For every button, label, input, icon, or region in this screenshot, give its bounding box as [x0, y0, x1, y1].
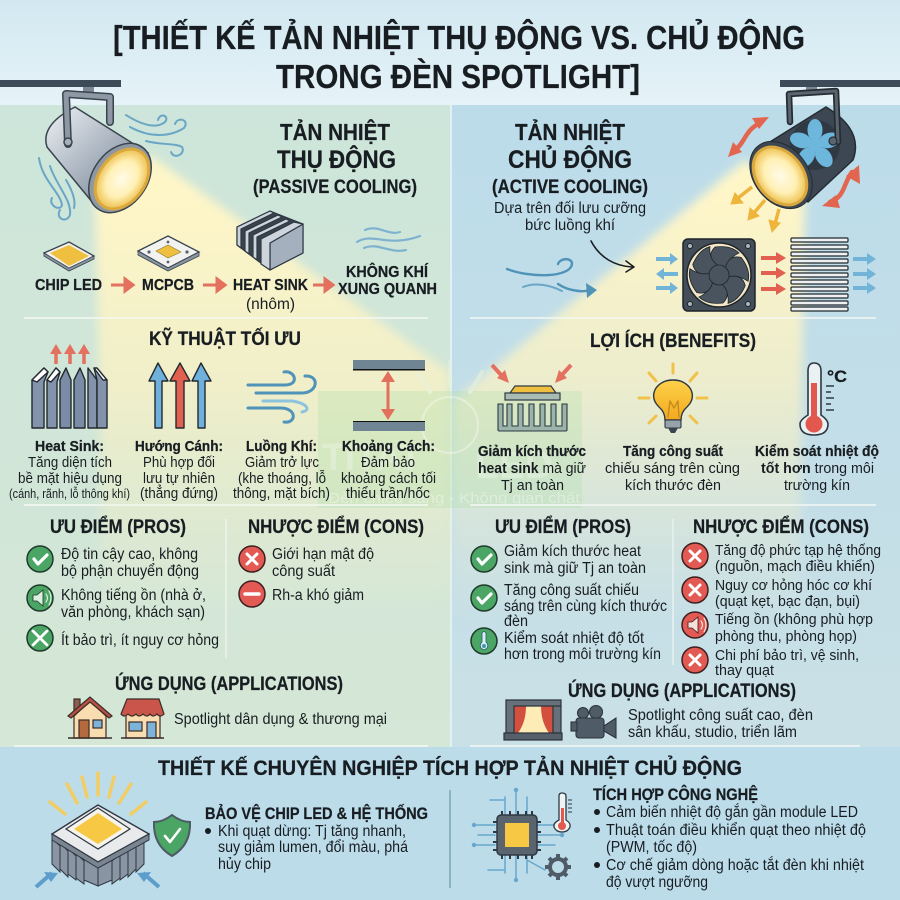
text: active cons list: Nguy cơ hỏng hóc cơ khí: [715, 577, 873, 594]
panel: active cooling background: [452, 105, 900, 747]
flow arrows: [111, 279, 333, 291]
section: active cons: [682, 516, 881, 679]
heading: passive cooling: THỤ ĐỘNG: [277, 144, 396, 174]
icon: thermometer: [800, 363, 847, 435]
text: LED chip protection: BẢO VỆ CHIP LED & HỆ THỐNG: [205, 803, 428, 823]
icon: finned heat sink with rising heat: [32, 344, 107, 428]
heading: cons: NHƯỢC ĐIỂM (CONS): [248, 516, 424, 538]
icon: check two: [471, 585, 497, 611]
watermark: TITAT: [322, 437, 422, 479]
text: airflow: [233, 438, 330, 502]
fan blades: [788, 119, 842, 170]
text: active cons list: (quạt kẹt, bạc đạn, bụi): [715, 593, 860, 610]
text: fin direction: [135, 438, 223, 502]
flow labels: MCPCB: [142, 277, 194, 294]
text: technology integration: Thuật toán điều khiển quạt theo nhiệt độ: [606, 822, 866, 839]
text: active cons list: Chi phí bảo trì, vệ sinh,: [715, 647, 859, 664]
text: active pros list: [504, 543, 667, 663]
heading: active cons: NHƯỢC ĐIỂM (CONS): [693, 516, 869, 538]
text: active cons list: thay quạt: [715, 662, 775, 679]
text: benefit 2: Tăng công suất: [623, 443, 723, 460]
icon: warm air arrows: [731, 187, 780, 232]
text: benefit 2: chiếu sáng trên cùng: [605, 460, 740, 477]
icon: shop: [121, 699, 164, 738]
icon: check: [27, 546, 53, 572]
text: fin direction: Phù hợp đối: [143, 455, 215, 471]
icon: small thermometer: [554, 793, 572, 832]
text: fin direction: Hướng Cánh:: [135, 438, 223, 455]
text: airflow: thông, mặt bích): [233, 486, 330, 502]
text: pros list: Ít bảo trì, ít nguy cơ hỏng: [61, 632, 219, 649]
text: active cons list: Tăng độ phức tạp hệ thống: [715, 542, 881, 559]
heading: passive cooling: TẢN NHIỆT: [280, 117, 390, 145]
heading: active cooling: Dựa trên đối lưu cưỡng: [494, 200, 646, 217]
flow labels: [35, 262, 437, 313]
text: clearance: thiểu trần/hốc: [346, 486, 430, 502]
text: technology integration: (PWM, tốc độ): [606, 839, 697, 856]
section: passive pros: [27, 516, 219, 651]
icon: cross: [239, 546, 265, 572]
icon: check one: [471, 546, 497, 572]
heading: applications: ỨNG DỤNG (APPLICATIONS): [115, 673, 343, 695]
text: heat sink: [9, 438, 130, 501]
icon: ambient air waves: [357, 228, 420, 251]
text: heat sink: (cánh, rãnh, lỗ thông khí): [9, 486, 130, 501]
text: LED chip protection: suy giảm lumen, đổi màu, phá: [218, 839, 408, 856]
text: clearance: khoảng cách tối: [341, 471, 436, 487]
icon: thermometer: °C: [827, 367, 847, 386]
section: benefits: [478, 330, 879, 494]
text: active cons list: (nguồn, mạch điều khiển): [715, 558, 875, 575]
text: clearance: Khoảng Cách:: [342, 438, 435, 455]
text: technology integration: TÍCH HỢP CÔNG NGHỆ: [593, 785, 758, 804]
vertical divider: bottom: [449, 790, 451, 888]
text: clearance: Đảm bảo: [361, 455, 415, 471]
title: [113, 18, 805, 95]
icon: clearance gap: [353, 360, 425, 431]
icon: shield: [154, 815, 190, 856]
text: LED chip protection: Khi quạt dừng: Tj tăng nhanh,: [218, 823, 406, 840]
text: clearance: [341, 438, 436, 502]
heading: pros: ƯU ĐIỂM (PROS): [50, 516, 186, 538]
panel: passive cooling background: [0, 105, 450, 747]
heading: passive cooling: (PASSIVE COOLING): [253, 177, 417, 198]
icon: gear: [545, 854, 571, 880]
icon: rotation arrows: [728, 117, 860, 208]
icon: MCPCB: [138, 236, 199, 271]
icon: active spotlight lamp with fan: [737, 80, 900, 221]
icon: silent speaker: [27, 585, 53, 611]
text: pros list: [61, 546, 219, 649]
heading: active cooling: bức luồng khí: [525, 217, 616, 234]
icon: fin direction arrows: [149, 363, 211, 428]
text: pros list: Không tiếng ồn (nhà ở,: [61, 587, 206, 604]
heading: active cooling: TẢN NHIỆT: [515, 117, 625, 145]
icon: cross two: [682, 577, 708, 603]
icon: thermometer badge: [471, 628, 497, 654]
text: cons list: Giới hạn mật độ: [272, 546, 374, 563]
icon: smaller heat sink: [492, 365, 571, 431]
text: active pros list: Giảm kích thước heat: [504, 543, 642, 560]
text: heat sink: Heat Sink:: [35, 438, 104, 455]
icon: passive spotlight lamp: [0, 80, 164, 225]
text: active application: [628, 707, 813, 741]
heading: active cooling: [492, 117, 648, 234]
text: fin direction: (thẳng đứng): [140, 484, 218, 502]
watermark: LED: [475, 445, 553, 487]
text: active pros list: sáng trên cùng kích thước: [504, 598, 667, 615]
text: technology integration: Cảm biến nhiệt độ gắn gần module LED: [606, 804, 858, 821]
watermark: [318, 362, 582, 508]
text: airflow: Giảm trở lực: [245, 455, 319, 471]
icon: circuit chip: [472, 788, 564, 882]
text: benefit 1: heat sink mà giữ: [478, 460, 586, 477]
section: passive cons: [239, 516, 424, 607]
flow labels: (nhôm): [246, 296, 295, 313]
icon: LED chip on heat sink: [36, 773, 159, 887]
title: [THIẾT KẾ TẢN NHIỆT THỤ ĐỘNG VS. CHỦ ĐỘNG: [113, 18, 805, 56]
text: LED chip protection: [205, 803, 428, 873]
text: cons list: Rh-a khó giảm: [272, 587, 364, 604]
heading: ky thuat toi uu: KỸ THUẬT TỐI ƯU: [149, 328, 301, 350]
flow labels: HEAT SINK: [233, 277, 308, 294]
text: active cons list: [715, 542, 881, 679]
heading: active applications: ỨNG DỤNG (APPLICATIONS): [568, 680, 796, 702]
flow labels: XUNG QUANH: [338, 281, 437, 298]
text: heat sink: Tăng diện tích: [28, 455, 112, 471]
heading: benefits: LỢI ÍCH (BENEFITS): [590, 330, 756, 352]
icon: stage: [504, 700, 562, 740]
flow labels: KHÔNG KHÍ: [346, 262, 428, 281]
text: active cons list: Tiếng ồn (không phù hợp: [715, 611, 873, 628]
panel: bottom band background: [0, 747, 900, 900]
text: benefit 1: Tj an toàn: [501, 477, 564, 494]
text: airflow: (khe thoáng, lỗ: [238, 470, 326, 487]
vertical divider: passive pros cons: [225, 519, 227, 658]
text: benefit 3: [755, 443, 879, 494]
text: airflow: Luồng Khí:: [246, 438, 317, 455]
text: cons list: công suất: [272, 563, 336, 580]
active cooling diagram: [507, 238, 876, 311]
section: optimization techniques: [9, 328, 436, 502]
text: benefit 3: Kiểm soát nhiệt độ: [755, 443, 879, 460]
text: active pros list: đèn: [504, 613, 528, 630]
icon: axial fan: [683, 239, 755, 311]
text: fin direction: lưu tự nhiên: [143, 471, 215, 487]
header band: [0, 0, 900, 106]
heading: active pros: ƯU ĐIỂM (PROS): [495, 516, 631, 538]
text: active application: Spotlight công suất cao, đèn: [628, 707, 813, 724]
text: active pros list: hơn trong môi trường kín: [504, 646, 661, 663]
icon: heat sink: [237, 211, 303, 270]
icon: house: [68, 697, 112, 738]
text: cons list: [272, 546, 374, 604]
icon: chip LED: [44, 242, 94, 271]
watermark: Đèn chiếu sáng - Không gian chất: [328, 490, 581, 507]
section: active pros: [471, 516, 667, 663]
divider lines: [14, 318, 876, 746]
flow labels: CHIP LED: [35, 277, 102, 294]
icon: airflow: [248, 372, 315, 422]
text: pros list: bộ phận chuyển động: [61, 563, 199, 580]
text: LED chip protection: hủy chip: [218, 856, 271, 873]
heat path diagram: [35, 211, 437, 313]
icon: tools: [27, 625, 53, 651]
text: benefit 3: tốt hơn trong môi: [761, 460, 874, 477]
text: active pros list: Tăng công suất chiếu: [504, 582, 639, 599]
arrows: exhaust air: [853, 253, 876, 294]
title: TRONG ĐÈN SPOTLIGHT]: [276, 58, 640, 95]
text: technology integration: Cơ chế giảm dòng hoặc tắt đèn khi nhiệt: [606, 857, 865, 874]
section: passive applications: [68, 673, 387, 738]
heading: active cooling: CHỦ ĐỘNG: [508, 144, 632, 174]
arrow: curved pointer: [591, 241, 634, 272]
icon: video camera: [571, 706, 616, 738]
icon: cross three: [682, 647, 708, 673]
text: active cons list: phòng thu, phòng họp): [715, 628, 857, 645]
section: professional design: [36, 756, 866, 891]
text: technology integration: độ vượt ngưỡng: [606, 874, 708, 891]
heading: passive cooling: [253, 117, 417, 198]
text: pros list: văn phòng, khách sạn): [61, 604, 205, 621]
text: benefit 2: kích thước đèn: [625, 477, 721, 494]
text: active application: sân khấu, studio, triển lãm: [628, 724, 797, 741]
icon: passive wind swirls: [39, 115, 186, 219]
arrows: air into fan: [656, 253, 678, 294]
text: benefit 3: trường kín: [784, 477, 850, 494]
icon: noise speaker: [682, 612, 708, 638]
text: pros list: Độ tin cậy cao, không: [61, 546, 198, 563]
text: active pros list: sink mà giữ Tj an toàn: [504, 560, 646, 577]
heading: active cooling: (ACTIVE COOLING): [492, 177, 648, 198]
text: heat sink: bề mặt hiệu dụng: [18, 471, 122, 487]
icon: cross one: [682, 543, 708, 569]
heading: professional design: THIẾT KẾ CHUYÊN NGHIỆP TÍCH HỢP TẢN NHIỆT CHỦ ĐỘNG: [158, 756, 742, 780]
text: application: Spotlight dân dụng & thương mại: [174, 711, 387, 728]
text: technology integration: [593, 785, 866, 891]
icon: light bulb: [639, 364, 707, 433]
arrows: hot air: [761, 252, 786, 295]
text: benefit 1: [478, 443, 586, 494]
vertical divider: active pros cons: [672, 519, 674, 665]
text: benefit 2: [605, 443, 740, 494]
section: active applications: [504, 680, 813, 741]
icon: wind stream: [507, 259, 597, 298]
text: benefit 1: Giảm kích thước: [478, 443, 586, 460]
icon: horizontal fin stack: [791, 238, 848, 311]
text: active pros list: Kiểm soát nhiệt độ tốt: [504, 630, 645, 647]
icon: minus: [239, 581, 265, 607]
